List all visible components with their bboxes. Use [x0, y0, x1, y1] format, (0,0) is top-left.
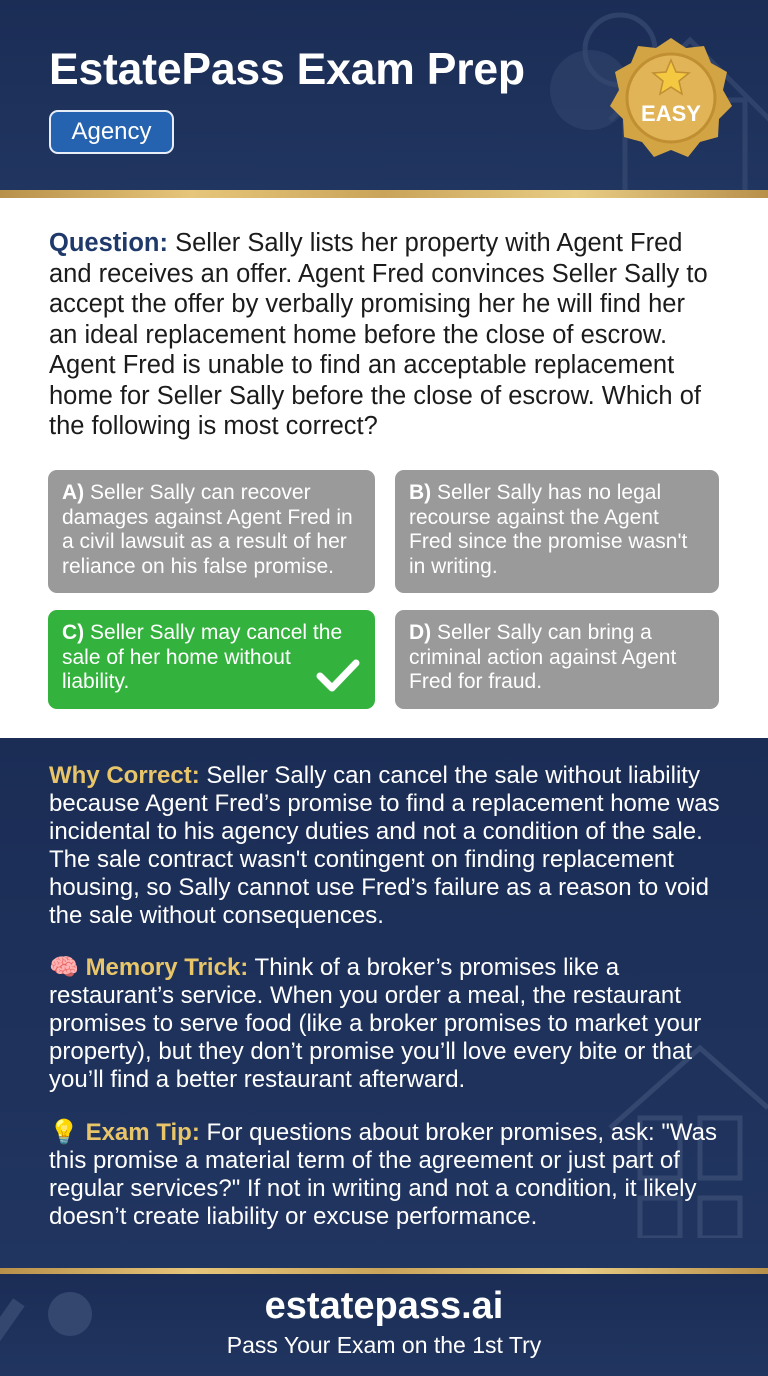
- category tag: Agency: [71, 118, 152, 145]
- option A: damages against Agent Fred in: [62, 506, 353, 528]
- why correct: Why Correct: Seller Sally can cancel the sale without liability: [49, 762, 700, 789]
- footer brand: estatepass.ai: [265, 1285, 503, 1327]
- question text: [49, 229, 708, 440]
- option A: reliance on his false promise.: [62, 554, 334, 578]
- option B: [395, 470, 719, 593]
- option A: [48, 470, 375, 593]
- why correct: the sale without consequences.: [49, 902, 384, 929]
- option D: D) Seller Sally can bring a: [409, 621, 652, 644]
- category tag: [49, 110, 174, 154]
- exam tip: regular services?" If not in writing and not a condition, it likely: [49, 1175, 697, 1202]
- option B: in writing.: [409, 554, 498, 578]
- option B: B) Seller Sally has no legal: [409, 481, 661, 504]
- explanation panel: [0, 738, 768, 1268]
- why correct: The sale contract wasn't contingent on finding replacement: [49, 846, 674, 873]
- memory trick: you’ll find a better restaurant afterward.: [49, 1066, 465, 1093]
- option A: A) Seller Sally can recover: [62, 481, 311, 504]
- memory trick: restaurant’s service. When you order a meal, the restaurant: [49, 982, 681, 1009]
- exam tip: 💡 Exam Tip: For questions about broker promises, ask: "Was: [49, 1119, 717, 1146]
- question text: accept the offer by verbally promising her he will find her: [49, 290, 685, 318]
- why correct: because Agent Fred’s promise to find a replacement home was: [49, 790, 720, 817]
- footer tagline: Pass Your Exam on the 1st Try: [227, 1332, 541, 1358]
- memory trick: property), but they don’t promise you’ll love every bite or that: [49, 1038, 692, 1065]
- footer: [0, 1274, 768, 1376]
- question panel: [0, 198, 768, 738]
- question text: the following is most correct?: [49, 412, 378, 440]
- question text: home for Seller Sally before the close of escrow. Which of: [49, 382, 701, 410]
- decorative keys: [0, 1292, 92, 1341]
- title: EstatePass Exam Prep: [49, 45, 525, 94]
- question text: an ideal replacement home before the close of escrow.: [49, 320, 667, 348]
- question text: Question: Seller Sally lists her property with Agent Fred: [49, 229, 682, 257]
- option D: criminal action against Agent: [409, 646, 676, 668]
- option B: recourse against the Agent: [409, 506, 659, 528]
- memory trick: [49, 954, 701, 1093]
- option C (correct): sale of her home without: [62, 646, 291, 668]
- memory trick: promises to serve food (like a broker promises to market your: [49, 1010, 701, 1037]
- header panel: [0, 0, 768, 190]
- question text: and receives an offer. Agent Fred convinces Seller Sally to: [49, 260, 708, 288]
- exam tip: this promise a material term of the agreement or just part of: [49, 1147, 680, 1174]
- option D: Fred for fraud.: [409, 670, 542, 693]
- difficulty badge: EASY: [641, 101, 701, 126]
- exam tip: doesn’t create liability or excuse performance.: [49, 1203, 537, 1230]
- question text: Agent Fred is unable to find an acceptable replacement: [49, 351, 674, 379]
- why correct: incidental to his agency duties and not a condition of the sale.: [49, 818, 703, 845]
- option B: Fred since the promise wasn't: [409, 530, 687, 553]
- option D: [395, 610, 719, 709]
- why correct: [49, 762, 720, 929]
- option C (correct): C) Seller Sally may cancel the: [62, 621, 342, 644]
- exam tip: [49, 1118, 717, 1230]
- option C (correct): [48, 610, 375, 709]
- icon: checkmark: [316, 660, 360, 692]
- difficulty badge: [610, 38, 732, 157]
- memory trick: 🧠 Memory Trick: Think of a broker’s promises like a: [49, 954, 619, 981]
- decorative house: [608, 1045, 768, 1238]
- decorative house/keys: [550, 12, 768, 190]
- option C (correct): liability.: [62, 670, 129, 693]
- why correct: housing, so Sally cannot use Fred’s failure as a reason to void: [49, 874, 709, 901]
- option A: a civil lawsuit as a result of her: [62, 530, 347, 553]
